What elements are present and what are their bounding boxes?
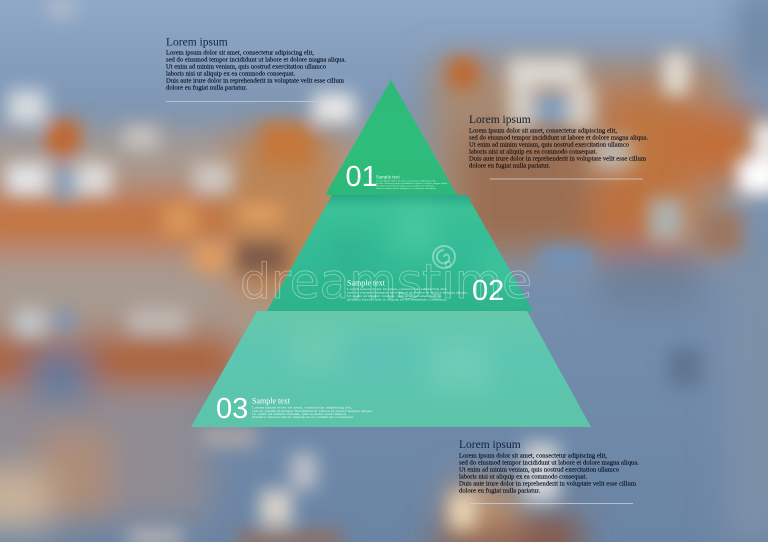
text block: upper right xyxy=(469,114,648,180)
tier 1 caption: ullamco laboris nisi ut aliquip ex ea commodo consequat. xyxy=(376,187,436,190)
tier 2 caption: ullamco laboris nisi ut aliquip ex ea commodo consequat. xyxy=(347,298,447,302)
heading: top left: Lorem ipsum xyxy=(166,36,228,48)
body: upper right: Ut enim ad minim veniam, quis nostrud exercitation ullamco xyxy=(469,142,629,148)
body: upper right: laboris nisi ut aliquip ex ea commodo consequat. xyxy=(469,148,597,156)
body: upper right: sed do eiusmod tempor incididunt ut labore et dolore magna aliqua. xyxy=(469,134,648,142)
body: top left xyxy=(166,50,346,92)
tier 3 caption: sed do eiusmod tempor incididunt ut labore et dolore magna aliqua. xyxy=(252,409,373,413)
body: upper right: Duis aute irure dolor in reprehenderit in voluptate velit esse cillum xyxy=(469,156,646,162)
body: top left: Ut enim ad minim veniam, quis nostrud exercitation ullamco xyxy=(166,64,326,70)
tier 3 caption xyxy=(252,396,373,419)
tier 2 caption: sed do eiusmod tempor incididunt ut labore et dolore magna aliqua. xyxy=(347,290,468,294)
body: upper right: dolore eu fugiat nulla pariatur. xyxy=(469,162,550,170)
body: bottom right: Ut enim ad minim veniam, quis nostrud exercitation ullamco xyxy=(459,466,619,474)
tier 2 band xyxy=(267,195,533,311)
tier 3 caption: ullamco laboris nisi ut aliquip ex ea commodo consequat. xyxy=(252,415,354,419)
tier 1 caption: Ut enim ad minim veniam, quis nostrud exercitation xyxy=(376,184,435,188)
watermark wordmark: dreamstime xyxy=(240,254,532,310)
tier 1 caption: Lorem ipsum dolor sit amet, consectetur adipiscing elit, xyxy=(376,180,436,182)
body: top left: laboris nisi ut aliquip ex ea commodo consequat. xyxy=(166,70,295,78)
heading: bottom right: Lorem ipsum xyxy=(459,439,521,451)
body: bottom right xyxy=(459,452,639,494)
tier 3 caption: Ut enim ad minim veniam, quis nostrud exercitation xyxy=(252,412,346,417)
body: top left: Lorem ipsum dolor sit amet, consectetur adipiscing elit, xyxy=(166,50,314,56)
body: bottom right: laboris nisi ut aliquip ex ea commodo consequat. xyxy=(459,474,587,480)
rule: bottom right xyxy=(470,503,633,504)
pyramid diagram xyxy=(191,80,591,427)
tier 1 caption: Sample text xyxy=(376,176,400,180)
body: top left: dolore eu fugiat nulla pariatur. xyxy=(166,84,247,92)
tier 1 band xyxy=(325,80,457,195)
rule: top left xyxy=(166,101,316,102)
tier 2 caption: Ut enim ad minim veniam, quis nostrud exercitation xyxy=(347,294,441,299)
tier 2 caption xyxy=(347,278,468,302)
tier 3 caption: Lorem ipsum dolor sit amet, consectetur adipiscing elit, xyxy=(252,406,352,410)
body: bottom right: sed do eiusmod tempor incididunt ut labore et dolore magna aliqua. xyxy=(459,460,639,466)
tier 1 caption xyxy=(376,176,448,190)
tier 2 number: 02 xyxy=(472,275,504,307)
tier 1 caption: sed do eiusmod tempor incididunt ut labore et dolore magna aliqua. xyxy=(376,182,448,185)
body: upper right xyxy=(469,128,648,170)
tier 3 band xyxy=(191,311,591,427)
body: bottom right: Lorem ipsum dolor sit amet, consectetur adipiscing elit, xyxy=(459,452,607,460)
watermark spiral icon xyxy=(433,246,455,268)
body: upper right: Lorem ipsum dolor sit amet, consectetur adipiscing elit, xyxy=(469,128,617,134)
tier 1 number: 01 xyxy=(346,161,378,193)
tier 3 caption: Sample text xyxy=(252,396,291,406)
rule: upper right xyxy=(490,178,643,180)
text block: top left xyxy=(166,36,346,102)
heading: upper right: Lorem ipsum xyxy=(469,114,531,126)
tier 2 caption: Sample text xyxy=(347,278,386,288)
body: bottom right: dolore eu fugiat nulla pariatur. xyxy=(459,488,540,494)
body: top left: sed do eiusmod tempor incididunt ut labore et dolore magna aliqua. xyxy=(166,56,346,64)
body: top left: Duis aute irure dolor in reprehenderit in voluptate velit esse cillum xyxy=(166,78,344,84)
text block: bottom right xyxy=(459,439,639,504)
body: bottom right: Duis aute irure dolor in reprehenderit in voluptate velit esse cillum xyxy=(459,480,636,488)
tier 2 caption: Lorem ipsum dolor sit amet, consectetur adipiscing elit, xyxy=(347,287,447,292)
tier 3 number: 03 xyxy=(216,393,248,425)
